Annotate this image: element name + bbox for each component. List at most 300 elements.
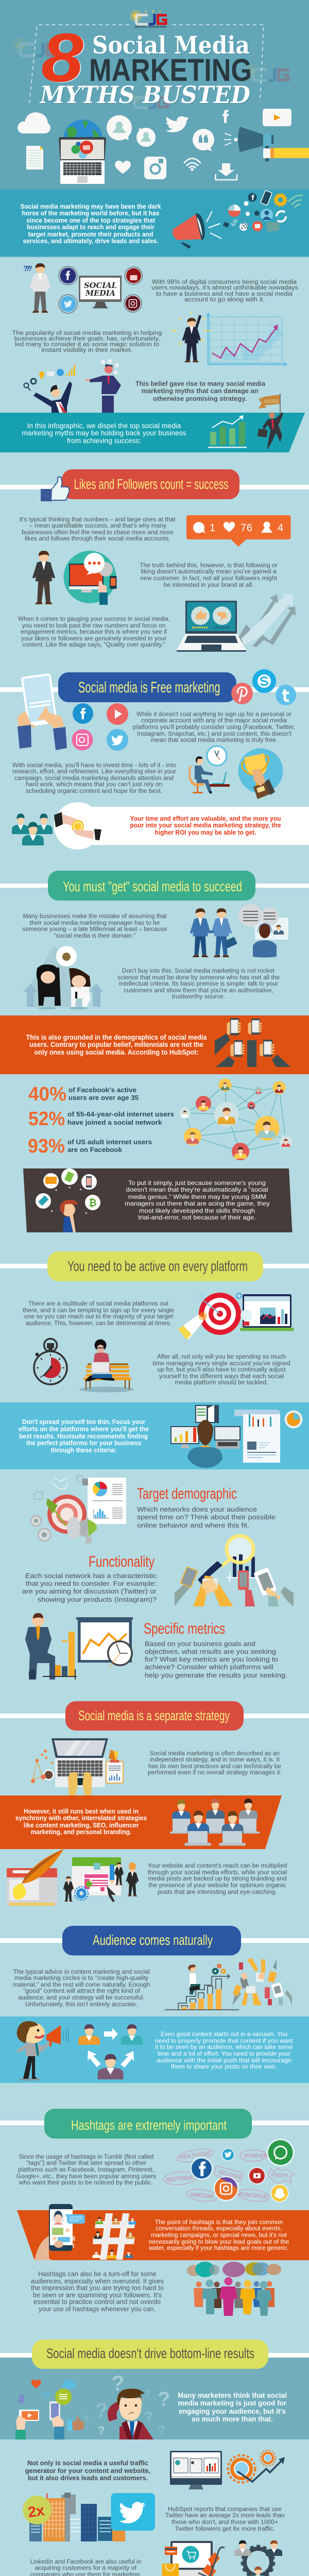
callout text: from achieving success: — [67, 437, 141, 445]
icon cluster: social icons — [223, 190, 303, 234]
text: 98 percent: users nowadays, it's almost unthinkable nowadays — [151, 285, 298, 291]
notification badge: 1 — [210, 522, 215, 534]
heading pill — [47, 1251, 263, 1281]
panel: myth 1 likes and followers — [0, 469, 309, 652]
icon: call centre team — [170, 1799, 260, 1845]
icon: trophy circle — [238, 748, 283, 799]
icon: confused man and social icons: SOCIAL — [84, 281, 117, 290]
title — [39, 20, 252, 109]
text: linkedin and facebook: acquiring customers for a majority of — [35, 2565, 137, 2571]
icon cluster: hashtag bubbles and social logos: #HEALTHYFOOD — [179, 2150, 211, 2161]
band text: This is also grounded in the demographics of social media — [26, 1033, 207, 1041]
icon: confused man and social icons — [23, 263, 142, 313]
text: traffic generator: Not only is social media a useful traffic — [27, 2459, 148, 2467]
callout text: Your time and effort are valuable, and the more you — [130, 815, 281, 822]
icon cluster: hashtag bubbles and social logos: #TASTY — [271, 2172, 289, 2180]
title: 8 — [41, 20, 84, 96]
stat: 40 percent: of Facebook's active — [68, 1086, 136, 1094]
text: the truth: be interested in your brand at all. — [164, 582, 253, 588]
text: 98 percent: account to go along with it. — [184, 297, 265, 303]
notification badge — [186, 515, 290, 547]
text: 98 percent — [151, 279, 298, 303]
text: functionality: showing your products (Instagram)? — [38, 1596, 157, 1603]
icon: woman on bench with laptop — [79, 1340, 134, 1392]
band text: synchrony with other, interrelated strategies — [15, 1815, 147, 1822]
notification badge: 4 — [278, 522, 283, 534]
icon cluster: hashtag bubbles and social logos — [163, 2139, 295, 2203]
panel: white callout — [12, 802, 309, 850]
callout text: media genius." While there may be young SMM — [128, 1193, 266, 1200]
band text: audience with the initial push that will encourage — [157, 2058, 291, 2064]
icon: play circle — [107, 703, 128, 725]
icon: question marks: ? — [144, 2388, 150, 2399]
stat: 52 percent: of 55-64-year-old internet users — [67, 1110, 174, 1118]
panel: dark callout — [23, 1168, 293, 1232]
text: independent strategy: performed even if no overall strategy manages it. — [148, 1770, 282, 1776]
text: typical advice — [13, 1969, 150, 2008]
icon: person at desk with clock — [188, 746, 230, 793]
text: hubspot reports: HubSpot reports that companies that use — [168, 2506, 282, 2513]
intro text: horse of the marketing world before, but it has — [22, 210, 160, 217]
icon: support person with chat — [238, 904, 288, 957]
text: the truth — [140, 563, 278, 588]
panel: myth 3 get social media — [0, 871, 309, 1232]
band text: them to share your posts on their own. — [171, 2064, 277, 2070]
text: typical advice: Unfortunately, this isn't entirely accurate. — [25, 2002, 138, 2008]
band text: engaging your audience, but it's — [179, 2408, 286, 2415]
icon: user bubble large — [107, 115, 132, 140]
icon cluster: hashtag bubbles and social logos: #FOREVER — [244, 2153, 267, 2159]
icon: paint browser window — [7, 1849, 64, 1906]
title: Social Media — [92, 31, 250, 59]
icon: instagram — [144, 157, 166, 179]
text: the truth: new customer. In fact, not all your followers might — [140, 575, 278, 582]
text: turn off — [31, 2270, 164, 2313]
band text: Many marketers think that social — [178, 2392, 287, 2399]
text: target demographic: Which networks does your audience — [137, 1505, 257, 1513]
text: usage of hashtags: Google+, etc., they have been popular among users — [16, 2174, 157, 2180]
band text: need to properly promote that content if you want — [155, 2038, 294, 2044]
text: many businesses: their social media marketing manager has to be — [30, 920, 160, 926]
text: website and content: the presence of your website for optimum organic — [148, 1883, 286, 1889]
text: typical thinking — [20, 517, 176, 542]
icon: target with hand and laptop — [178, 1292, 294, 1340]
text: belief: otherwise promising strategy. — [153, 395, 247, 402]
title: MARKETING — [89, 53, 252, 88]
text: turn off: the impression that you are trying too hard to — [31, 2284, 164, 2292]
icon: red megaphone — [173, 211, 221, 249]
text: usage of hashtags: platforms such as Facebook, Instagram, Pinterest, — [18, 2167, 154, 2173]
heading pill: Hashtags are extremely important — [71, 2117, 227, 2133]
text: popularity: businesses achieve their goals, has, unfortunately, — [14, 336, 160, 342]
text: dont buy: intellectual criteria. Its basic premise is simple: talk to your — [119, 981, 278, 987]
text: website and content: through your social media efforts, while your social — [148, 1870, 287, 1876]
text: gauging success: engagement metrics, because this is where you see if — [21, 629, 167, 635]
panel: myth 7 hashtags — [0, 2109, 309, 2316]
icon: twitter bird — [165, 116, 189, 132]
band text: time and a lot of effort. You need to provide your — [158, 2051, 290, 2057]
text: specific metrics — [144, 1620, 287, 1679]
text: website and content: posts that are interesting and eye-catching. — [158, 1889, 277, 1895]
intro text: services, and ultimately, drive leads and sales. — [23, 238, 159, 245]
panel: teal callout — [0, 394, 305, 452]
icon: question marks: ? — [144, 2409, 153, 2425]
text: traffic generator: generator for your content and website, — [25, 2467, 150, 2475]
text: belief — [135, 380, 266, 402]
icon: bearded man — [32, 551, 55, 604]
panel: orange synchrony band — [0, 1795, 282, 1849]
text: turn off: audiences, especially when overused. It gives — [31, 2278, 164, 2285]
icon: question marks — [83, 2371, 170, 2437]
icon: man with success flag: SUCCESS — [264, 399, 279, 404]
text: hubspot reports: Twitter followers get 6x more traffic. — [175, 2526, 275, 2532]
text: functionality: Each social network has a characteristic — [25, 1572, 157, 1580]
heading pill: Social media is a separate strategy — [78, 1708, 230, 1723]
icon: man with metrics board — [25, 1613, 133, 1680]
icon: online shopping — [162, 2541, 225, 2576]
text: typical advice: audience, and your strategy will be successful. — [19, 1995, 144, 2001]
text: typical thinking: businesses often feel the need to chase more and more — [22, 530, 174, 536]
icon: man with success flag — [258, 394, 283, 450]
icon: pinterest — [231, 683, 253, 704]
band text: Don't spread yourself too thin. Focus your — [22, 1418, 145, 1426]
band text: marketing campaigns, or special news, but it's not — [151, 2232, 287, 2239]
stat: 52 percent: have joined a social network — [67, 1118, 162, 1126]
text: independent strategy: has its own best practices and can technically be — [148, 1764, 281, 1770]
icon: happy man jumping — [171, 311, 211, 362]
icon: question marks: ? — [95, 2399, 108, 2422]
text: functionality: that you need to consider. For example: — [26, 1580, 157, 1587]
icon: team around gear — [234, 2540, 282, 2576]
icon cluster: hashtag bubbles and social logos: #FUNFORFUN — [237, 2191, 267, 2200]
text: usage of hashtags: who want their posts to be noticed by the public. — [19, 2180, 153, 2186]
chart: people network — [179, 1079, 293, 1160]
text: website and content: media posts are backed up by strong branding and — [148, 1876, 286, 1882]
text: many businesses: "social media is their domain." — [54, 933, 136, 939]
text: functionality: are you aiming for discussion (Twitter) or — [22, 1587, 157, 1595]
title frame — [29, 25, 264, 103]
text: multitude: audience. This, however, can be detrimental at times. — [26, 1320, 171, 1327]
band text: so much more than that. — [192, 2415, 273, 2423]
panel: blue band — [0, 1402, 309, 1469]
callout text — [125, 1179, 270, 1221]
text: independent strategy — [148, 1751, 282, 1776]
band text: only ones using social media. According to HubSpot: — [34, 1048, 199, 1056]
intro text: Social media marketing may have been the dark — [21, 203, 161, 210]
icon: confused man and social icons: MEDIA — [85, 289, 115, 298]
watermarks — [14, 39, 289, 108]
callout text: marketing myths may be holding back your business — [22, 429, 186, 437]
text: the truth: liking doesn't automatically mean you've gained a — [141, 569, 277, 575]
callout text: To put it simply, just because someone's young — [128, 1179, 266, 1187]
callout text: In this infographic, we dispel the top social media — [27, 422, 181, 430]
heading pill: Social media is Free marketing — [78, 679, 220, 696]
icon: man reaching for marketing icons — [24, 365, 75, 413]
text: 98 percent: to have a business and not have a social media — [156, 291, 293, 297]
icon: hands exchanging coin — [54, 812, 101, 840]
text: typical advice: media marketing circles is to "create high-quality — [14, 1975, 148, 1981]
text: target demographic — [137, 1485, 276, 1529]
icon cluster: hashtag bubbles and social logos: #DELICIOUS — [218, 2169, 242, 2180]
band text: it to be seen by an audience, which can take some — [156, 2044, 293, 2050]
text: specific metrics: Specific metrics — [144, 1620, 225, 1637]
text: after all: time managing every single account you've signed — [152, 1361, 290, 1367]
text: after all: After all, not only will you be spending so much — [157, 1354, 286, 1360]
icon: wifi — [184, 159, 201, 170]
text: typical advice: material," and the rest will come naturally. Enough — [13, 1982, 150, 1988]
text: 98 percent: With 98% of digital consumers being social media — [152, 279, 297, 285]
intro text: since become one of the top strategies that — [26, 217, 156, 224]
icon: angry boss pointing — [85, 359, 121, 413]
text: typical advice: The typical advice in content marketing and social — [13, 1969, 149, 1975]
text: hubspot reports — [165, 2506, 285, 2532]
icon: thumbs up — [41, 477, 70, 501]
callout text: doesn't mean that they're automatically a "social — [126, 1186, 268, 1193]
text: target demographic: online behavior and where this fit. — [137, 1521, 249, 1529]
text: turn off: essential to practice control and not overdo — [33, 2298, 161, 2306]
text: sign up: corporate account with any of the major social media — [141, 718, 287, 724]
band text: media marketing is just good for — [178, 2399, 287, 2407]
stat: 93 percent: are on Facebook — [67, 1146, 123, 1154]
text: many businesses: someone young – a late Millennial at least – because — [23, 926, 167, 933]
icon: user bubble small — [136, 128, 156, 147]
text: independent strategy: Social media marketing is often described as an — [150, 1751, 280, 1757]
icon: team — [12, 814, 53, 845]
text: many businesses — [23, 913, 167, 939]
heading pill — [48, 871, 255, 901]
text: specific metrics: for? What key metrics are you looking to — [145, 1655, 278, 1663]
logo — [131, 10, 167, 29]
text: hubspot reports: those who don't, and those with 1000+ — [171, 2519, 278, 2526]
icon: skype — [252, 669, 276, 693]
band text — [15, 1808, 147, 1836]
band text: The point of hashtags is that they join common — [154, 2219, 283, 2226]
text: turn off: your use of hashtags whenever you can. — [39, 2306, 156, 2313]
text: gauging success: you need to look past the raw numbers and focus on — [22, 623, 165, 629]
heading pill: You must "get" social media to succeed — [63, 878, 242, 894]
callout text — [130, 815, 281, 836]
icon: document — [26, 146, 43, 170]
text: dont buy: science that must be done by someone who has met all the — [117, 975, 280, 981]
icon: confused man and social icons: ??? — [23, 264, 32, 273]
icon: thinking boy with thought clouds — [36, 1168, 100, 1232]
text: popularity: led many to consider it as some magic solution to — [15, 342, 159, 348]
icon: megaphone and arm — [224, 127, 309, 161]
text: specific metrics: objectives, what results are you seeking — [145, 1648, 276, 1655]
panel: introduction — [12, 263, 298, 413]
heading pill — [62, 469, 239, 499]
band text: efforts on the platforms where you'll get the — [19, 1426, 149, 1433]
text: after all: media platform should be tackled. — [175, 1380, 268, 1386]
icon cluster: hashtag bubbles and social logos: #AWESOME — [190, 2192, 214, 2200]
icon: quote bubble — [193, 129, 214, 151]
icon: four hands with phones — [215, 1018, 290, 1067]
icon: share flow between people — [78, 2024, 143, 2079]
stat: 52 percent: 52% — [28, 1108, 65, 1130]
title: MYTHS BUSTED — [39, 81, 250, 109]
text: sign up: platforms you'll probably consider using (Facebook, Twitter, — [133, 724, 295, 731]
icon: analyst at computers — [170, 1405, 241, 1468]
icon: confused man — [108, 2388, 153, 2439]
icon: twitter circle — [107, 729, 128, 751]
panel: question band — [0, 2358, 309, 2439]
stat: 93 percent — [28, 1136, 152, 1157]
icon: facebook circle — [73, 703, 93, 724]
text: traffic generator — [25, 2459, 150, 2482]
band text: However, it still runs best when used in — [24, 1808, 139, 1815]
callout text: most likely developed the skills through — [139, 1207, 255, 1214]
text: specific metrics: help you generate the results your seeking. — [145, 1671, 287, 1679]
panel: myth 6 audience — [0, 1926, 309, 2083]
panel: hashtag band — [17, 2204, 309, 2260]
icon: handshake businessmen — [190, 908, 237, 957]
icon: laptop with thumbs and arrows — [177, 594, 296, 652]
heading pill — [65, 1701, 244, 1731]
text: independent strategy: independent strategy, and in some ways, it is. It — [150, 1757, 280, 1763]
intro text: businesses adapt to reach and engage their — [27, 224, 154, 231]
panel: myth 2 free marketing — [0, 669, 309, 850]
text: website and content: Your website and content's reach can be multiplied — [148, 1863, 287, 1869]
text: multitude: one so you can reach out to the majority of your target — [24, 1314, 174, 1320]
band text — [26, 1033, 207, 1056]
band text: conversation threads, especially about events, — [156, 2226, 282, 2232]
text: multitude — [23, 1301, 174, 1327]
icon: phone in hands — [18, 673, 67, 750]
text: typical thinking: – mean quantifiable success, and that's why many — [29, 523, 166, 529]
band text: best results. Hootsuite recommends finding — [19, 1433, 148, 1440]
text: turn off: be seen or are spamming your followers. It's — [33, 2292, 162, 2299]
stat: 52 percent — [28, 1108, 174, 1130]
icon: stopwatch — [34, 1338, 67, 1384]
heading pill — [44, 2109, 252, 2139]
stat: 93 percent: 93% — [28, 1136, 65, 1157]
icon: question marks: ? — [83, 2414, 89, 2425]
text: turn off: Hashtags can also be a turn-off for some — [38, 2270, 157, 2278]
text: hubspot reports: Twitter have an average 2x more leads than — [165, 2513, 285, 2519]
heading pill — [32, 2340, 268, 2369]
text: gauging success: your likers or followers are genuinely invested in your — [21, 636, 166, 642]
text: typical thinking: likes and follows through their social media accounts. — [25, 536, 170, 542]
text: popularity — [12, 330, 162, 353]
text: usage of hashtags — [16, 2154, 157, 2186]
text: many businesses: Many businesses make the mistake of assuming that — [23, 913, 167, 920]
text: gauging success: When it comes to gauging your success in social media, — [18, 616, 170, 622]
stat: 40 percent — [28, 1083, 139, 1105]
text: sign up: Instagram, Snapchat, etc.) and post content, this doesn't — [137, 731, 292, 737]
icon cluster: hashtag bubbles and social logos: #BESTFRIENDS — [165, 2174, 197, 2183]
text: specific metrics: Based on your business goals and — [145, 1640, 255, 1648]
icon: monitor dashboard — [170, 2451, 222, 2489]
text: linkedin and facebook — [30, 2559, 141, 2576]
icon: question marks: ? — [158, 2388, 170, 2411]
text: usage of hashtags: "tags") and Twitter that later spread to other — [26, 2160, 146, 2166]
text: the truth: The truth behind this, however, is that following or — [140, 563, 278, 569]
text: typical advice: "good" content will attract the right kind of — [23, 1988, 141, 1994]
text: linkedin and facebook: LinkedIn and Facebook are also useful in — [30, 2559, 141, 2565]
icon: instagram circle — [72, 730, 93, 750]
callout text: managers out there that are acing the game, they — [125, 1200, 270, 1207]
text: invest time: campaign, social media marketing demands attention and — [14, 775, 174, 782]
callout text: pour into your social media marketing strategy, the — [130, 822, 281, 829]
icon: question marks: ? — [111, 2371, 125, 2395]
panel: myth 5 separate strategy — [0, 1701, 309, 1906]
text: after all — [152, 1354, 290, 1386]
stat: 40 percent: 40% — [28, 1083, 66, 1105]
icon: web design team — [63, 1857, 139, 1902]
intro text: target market, promote their products and — [28, 231, 153, 238]
icon: city with 2x badge and twitter tile — [23, 2493, 155, 2541]
band text: like content marketing, SEO, influencer — [24, 1822, 139, 1829]
band text — [155, 2031, 294, 2070]
icon: man shouting with megaphone — [16, 2021, 68, 2081]
icon: city with 2x badge and twitter tile: 2x — [27, 2502, 46, 2521]
icon: pie chart badge — [284, 1411, 303, 1428]
heading pill — [62, 1926, 241, 1956]
text: functionality: Functionality — [89, 1553, 154, 1570]
text: gauging success: content. Like the adage says, "Quality over quantity." — [22, 642, 165, 648]
panel: promote band — [0, 2016, 309, 2083]
text: dont buy: trustworthy source. — [172, 994, 225, 1000]
stat: 40 percent: users are over age 35 — [68, 1094, 139, 1101]
icon: play tile — [263, 109, 291, 126]
band text: users. Contrary to popular belief, millennials are not the — [29, 1041, 203, 1048]
text: usage of hashtags: Since the usage of hashtags in Tumblr (first called — [19, 2154, 153, 2160]
text: sign up — [133, 711, 295, 743]
panel: intro band — [0, 190, 309, 258]
text: belief: marketing myths that can damage an — [141, 387, 259, 395]
icon: thinking boy with thought clouds: ₿ — [89, 1198, 97, 1209]
callout text — [22, 422, 186, 445]
band text: Even good content starts out in a vacuum. You — [161, 2031, 287, 2038]
text: invest time: hard work, which means that you can't just rely on — [26, 782, 162, 788]
band text: marketing, and personal branding. — [31, 1828, 131, 1836]
icon: teal circle with monitor — [64, 551, 116, 605]
icon: target, report and megaphone — [31, 1476, 126, 1544]
icon: phone with chat — [35, 2204, 85, 2260]
text: traffic generator: but it also drives leads and customers. — [28, 2474, 148, 2482]
callout text: trial-and-error, not because of their age. — [138, 1214, 256, 1221]
text: target demographic: spend time on? Think about their possible — [137, 1513, 276, 1521]
panel: myth 8 bottom line — [0, 2340, 309, 2576]
text: after all: up for, but you'll also have to continually adjust — [158, 1367, 286, 1373]
icon: social hands — [15, 2380, 84, 2439]
text: specific metrics: achieve? Consider which platforms will — [145, 1663, 273, 1671]
icon: laptop from above — [31, 1738, 123, 1795]
text: gauging success — [18, 616, 170, 648]
text: functionality — [22, 1553, 157, 1603]
text: sign up: mean that social media marketing is truly free. — [151, 737, 278, 743]
text: after all: yourself to the different ways that each social — [159, 1374, 284, 1380]
icon: hands with devices and magnifier — [175, 1535, 294, 1606]
text: multitude: there, and it can be tempting to sign up for every single — [23, 1308, 174, 1314]
text: invest time: research, effort, and refinement. Like everything else in your — [12, 769, 176, 775]
text: typical thinking: It's typical thinking that numbers – and large ones at that — [20, 517, 176, 523]
text: dont buy: Don't buy into this. Social media marketing is not rocket — [122, 968, 275, 974]
icon: heart — [115, 161, 131, 174]
icon: hands with devices — [232, 1958, 292, 2005]
icon: question marks: ? — [98, 2424, 105, 2437]
intro text — [21, 203, 161, 245]
icon: download — [215, 163, 237, 180]
stat: 93 percent: of US adult internet users — [67, 1138, 152, 1146]
icon: question marks: ? — [158, 2424, 165, 2437]
text: belief: This belief gave rise to many social media — [135, 380, 266, 387]
band text: through these criteria: — [51, 1447, 116, 1454]
chart: green bars with arrow — [208, 415, 247, 448]
text: dont buy: customers and show them that you're an authoritative, — [124, 988, 273, 994]
panel: demographics band — [0, 1015, 309, 1074]
band text: water, especially if your hashtags are more generic. — [148, 2245, 289, 2251]
